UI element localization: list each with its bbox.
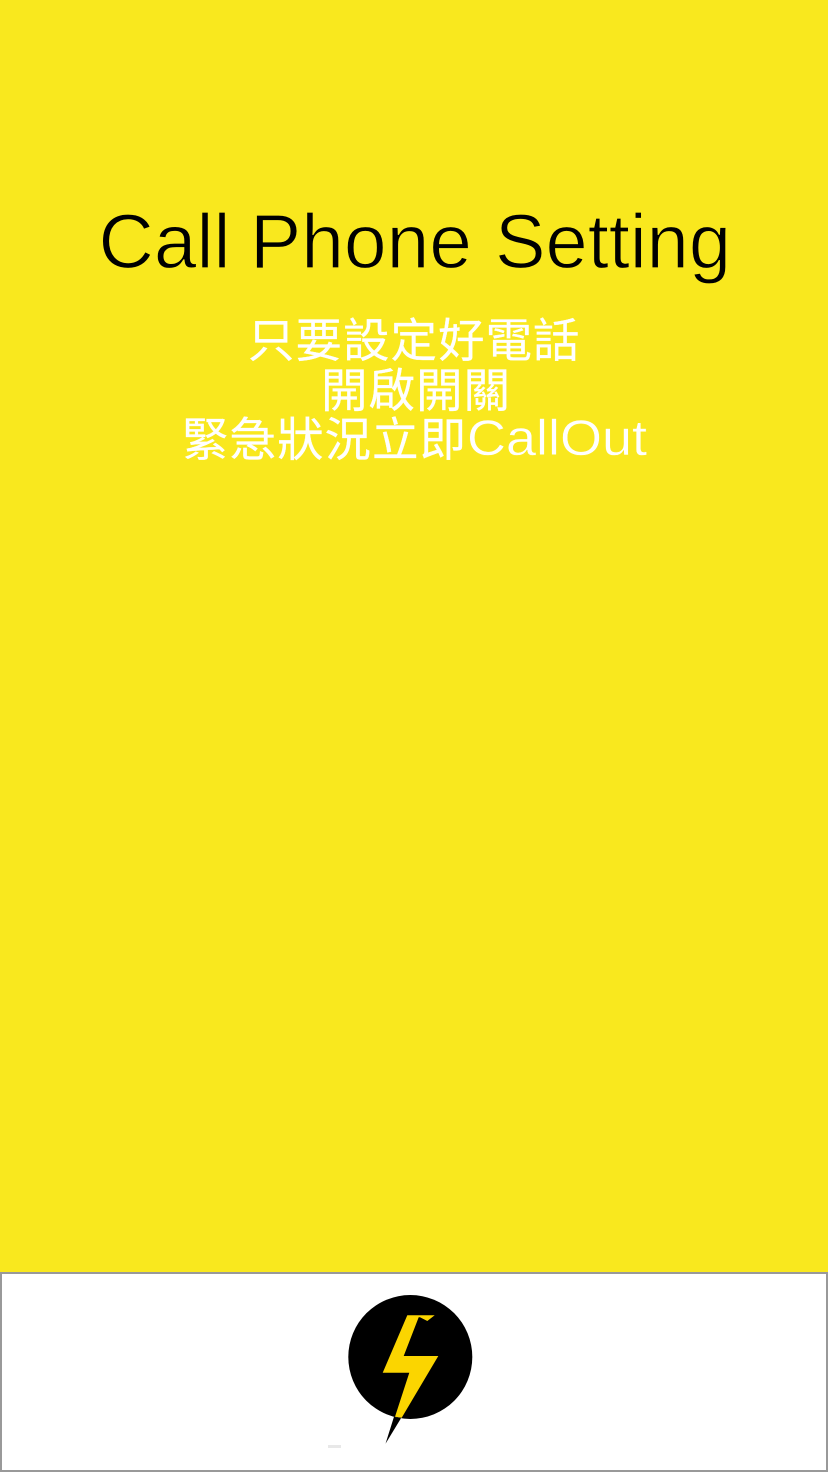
footer panel xyxy=(1,1273,827,1471)
description line 3 xyxy=(182,410,647,466)
description line 1: 只要設定好電話 xyxy=(248,315,580,367)
icon: lightning bolt logo xyxy=(348,1295,472,1444)
title: Call xyxy=(98,199,230,285)
small grey dash xyxy=(328,1445,341,1448)
description line 2: 開啟開關 xyxy=(321,365,511,417)
title: Setting xyxy=(495,199,731,285)
description line 3: 緊急狀況立即 xyxy=(182,414,467,466)
description line 3: CallOut xyxy=(467,410,647,466)
description text xyxy=(182,315,647,466)
title: Phone xyxy=(250,199,472,285)
title xyxy=(98,199,731,285)
